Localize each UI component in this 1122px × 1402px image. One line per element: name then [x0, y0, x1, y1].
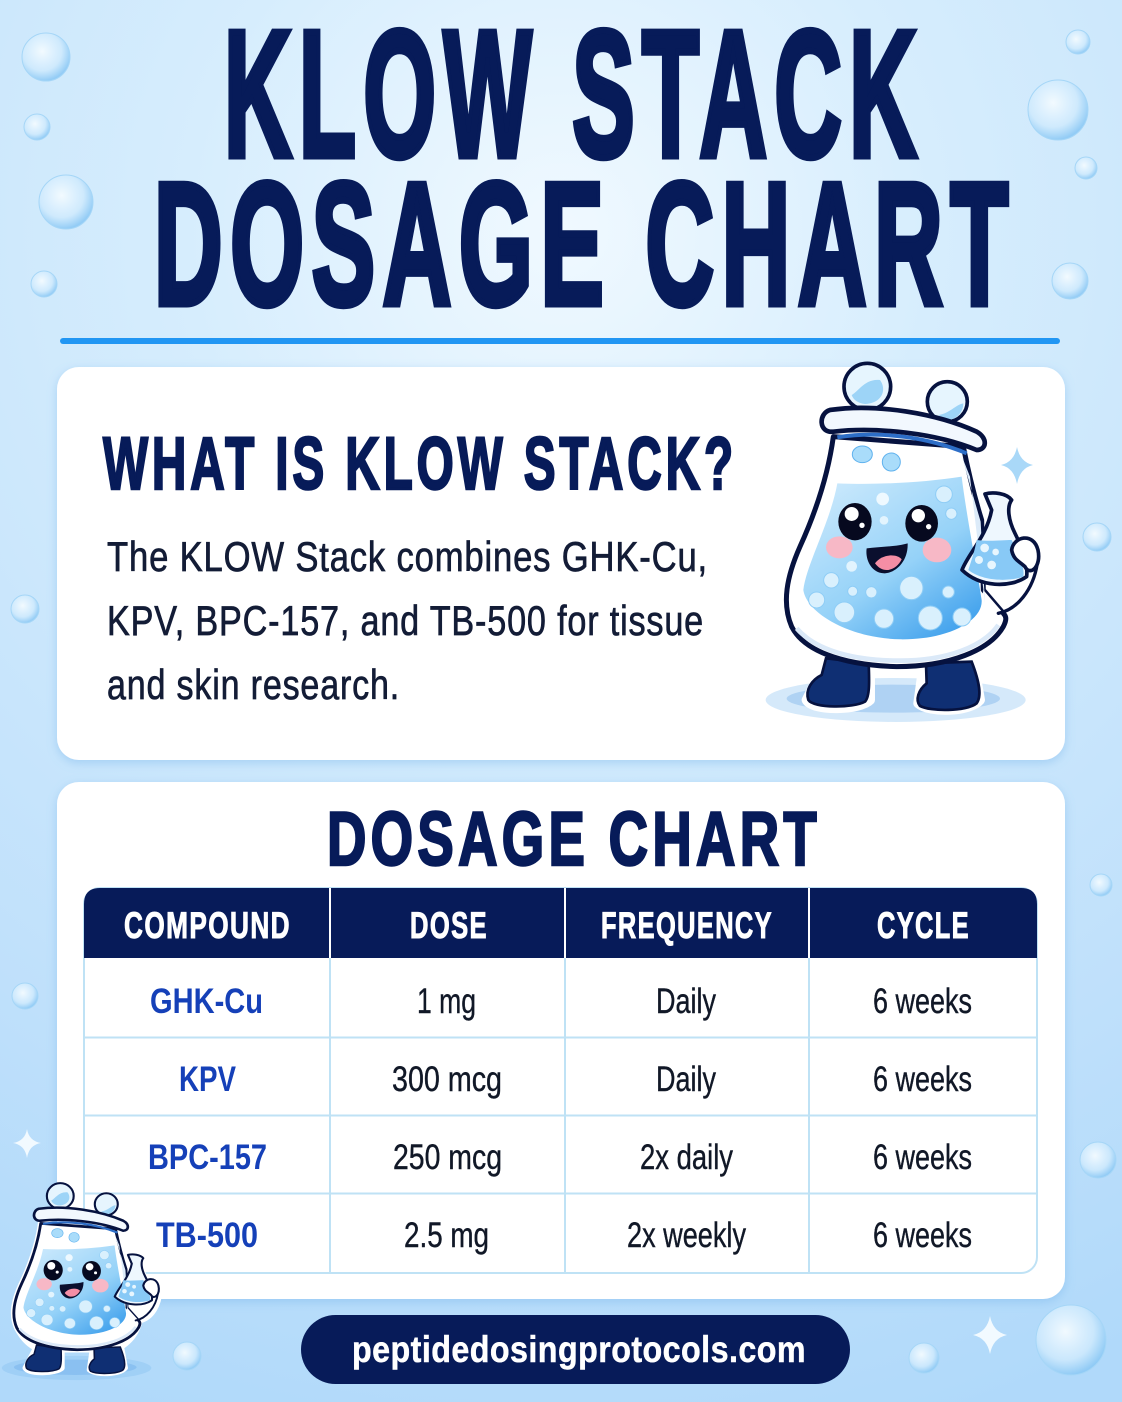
frequencies: Daily [656, 982, 716, 1021]
compound names: BPC-157 [148, 1138, 267, 1177]
heading: what is KLOW stack: WHAT IS KLOW STACK? [103, 422, 737, 505]
description text: The KLOW Stack combines GHK-Cu, [107, 533, 708, 580]
title [154, 0, 1016, 341]
panel: what is KLOW stack [57, 363, 1065, 760]
cycles: 6 weeks [873, 1138, 972, 1177]
table header: CYCLE [877, 905, 970, 946]
frequencies: Daily [656, 1060, 716, 1099]
compound names: KPV [179, 1060, 237, 1099]
doses [392, 982, 502, 1255]
cycles: 6 weeks [873, 1216, 972, 1255]
table header: FREQUENCY [601, 905, 773, 946]
icon: sparkle bottom right [973, 1316, 1007, 1354]
dosage table [84, 888, 1037, 1273]
compound names [148, 982, 267, 1255]
heading: dosage chart: DOSAGE CHART [327, 797, 821, 882]
title divider [60, 338, 1060, 344]
frequencies: 2x daily [640, 1138, 733, 1177]
table header: DOSE [410, 905, 488, 946]
compound names: TB-500 [156, 1216, 258, 1255]
frequencies: 2x weekly [627, 1216, 746, 1255]
compound names: GHK-Cu [150, 982, 263, 1021]
doses: 300 mcg [392, 1060, 502, 1099]
icon: sparkle left [13, 1129, 41, 1158]
website pill [301, 1315, 850, 1384]
table header [124, 905, 970, 946]
doses: 1 mg [417, 982, 476, 1021]
description text: and skin research. [107, 661, 400, 708]
doses: 2.5 mg [404, 1216, 489, 1255]
frequencies [627, 982, 746, 1255]
panel: dosage chart [57, 782, 1065, 1299]
website pill: peptidedosingprotocols.com [352, 1329, 806, 1370]
table header: COMPOUND [124, 905, 291, 946]
icon: sparkle [1001, 447, 1033, 484]
cycles: 6 weeks [873, 982, 972, 1021]
icon: small flask mascot [2, 1183, 159, 1380]
description text: KPV, BPC-157, and TB-500 for tissue [107, 597, 704, 644]
cycles: 6 weeks [873, 1060, 972, 1099]
icon: flask mascot [766, 363, 1039, 722]
cycles [873, 982, 972, 1255]
description text [107, 533, 708, 708]
doses: 250 mcg [393, 1138, 502, 1177]
